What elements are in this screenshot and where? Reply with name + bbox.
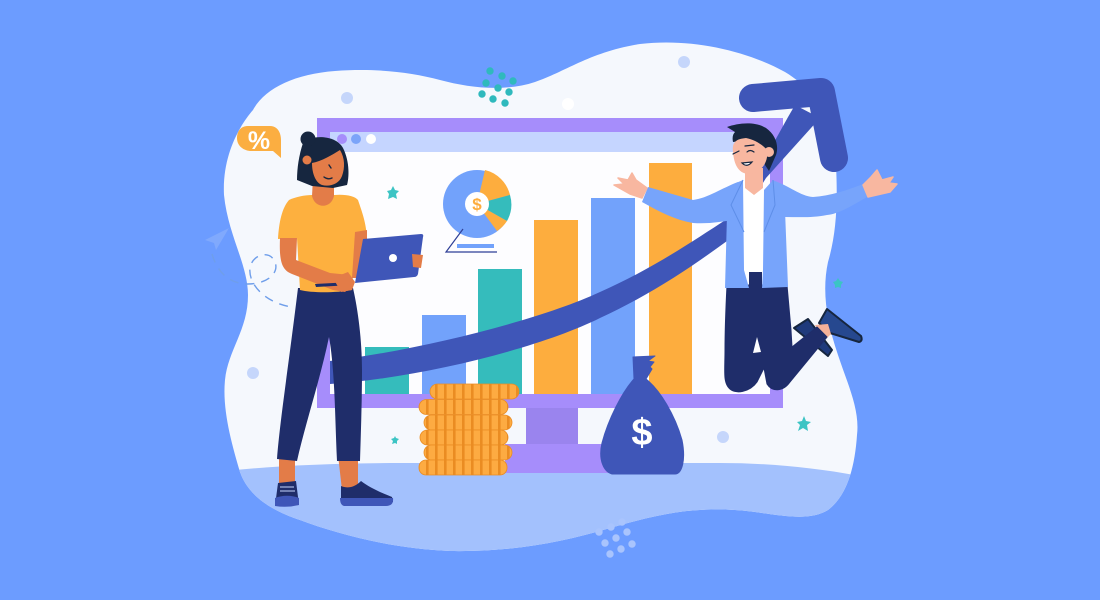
pen: [315, 282, 352, 287]
floor: [240, 463, 850, 551]
pie chart: [443, 170, 511, 252]
money bag: $: [631, 412, 653, 454]
tablet: [355, 234, 423, 283]
shirt: [743, 186, 764, 274]
money bag: [601, 356, 684, 474]
hands: [333, 254, 423, 292]
browser dots: [337, 134, 376, 144]
decorative dots: light cluster: [595, 518, 636, 558]
hair back: [727, 123, 777, 171]
percent speech bubble: %: [248, 127, 270, 155]
gap between legs: [753, 337, 761, 353]
shoes: [275, 481, 393, 507]
hands: [614, 170, 897, 198]
face details: [733, 145, 754, 165]
left arm: [642, 182, 738, 223]
browser bar: [330, 132, 770, 152]
front shoe: [819, 309, 862, 342]
head and hair: [297, 132, 348, 188]
monitor screen: [330, 132, 770, 394]
growth arrow: [330, 92, 834, 384]
pie chart: $: [472, 195, 482, 214]
monitor: [317, 118, 783, 473]
lapels: [731, 180, 775, 232]
ear: [764, 147, 774, 157]
ankle: [815, 324, 831, 340]
jacket: [642, 180, 867, 288]
person: man: [614, 123, 897, 392]
face: [733, 138, 767, 174]
icon: paper plane with dashed trail: [205, 228, 292, 307]
feet: [279, 455, 358, 490]
arm: [280, 238, 353, 292]
decorative circles: [247, 56, 729, 443]
percent speech bubble: [237, 126, 281, 158]
waist: [749, 272, 762, 288]
background blob: [224, 42, 857, 551]
coin stack: [419, 384, 519, 475]
bar chart: [365, 163, 692, 394]
monitor stand: [505, 406, 615, 473]
neck: [745, 168, 763, 195]
monitor frame: [317, 118, 783, 408]
decorative dots: teal cluster: [478, 67, 517, 107]
trousers: [725, 285, 827, 392]
far arm: [352, 230, 367, 278]
trousers: [277, 288, 362, 461]
back shoe: [794, 319, 832, 356]
right arm: [772, 180, 867, 217]
person: woman: [237, 126, 423, 507]
stars: [387, 186, 843, 444]
neck: [312, 178, 334, 206]
shirt: [278, 194, 367, 292]
